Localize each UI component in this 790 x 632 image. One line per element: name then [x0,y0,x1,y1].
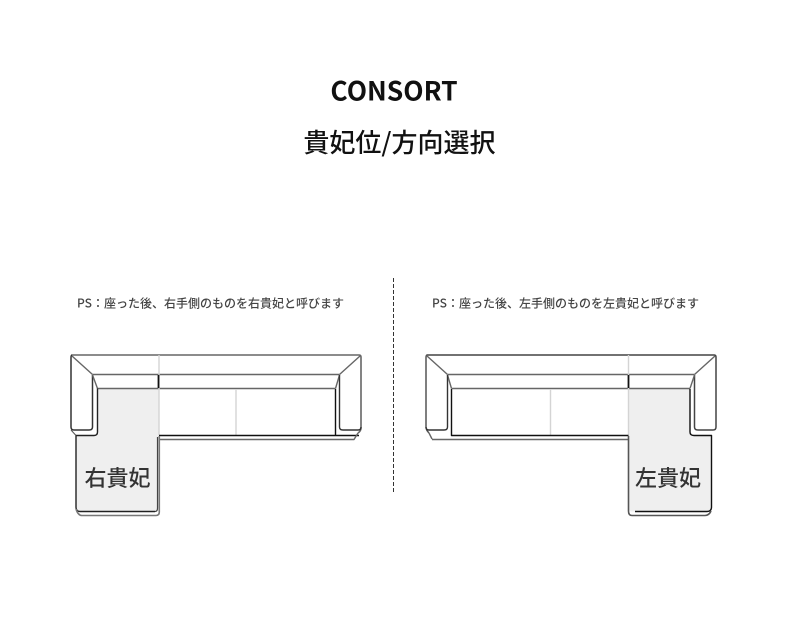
outer back [427,355,716,430]
gray seams [159,355,236,435]
subtitle: 貴妃位/方向選択 [303,123,496,160]
label: left chaise: 左貴妃 [635,461,701,493]
back seam [158,375,160,388]
sofa diagram: left chaise [426,355,716,516]
chaise highlight [628,388,712,512]
outer back [72,355,361,433]
chaise highlight [76,388,159,512]
note: right: PS：座った後、左手側のものを左貴妃と呼びます [432,294,699,312]
seat front [76,388,155,512]
center divider [392,278,394,492]
back cushion lines [427,356,715,388]
label: right chaise: 右貴妃 [84,461,151,493]
title: CONSORT [330,70,458,108]
back seam [628,375,630,388]
right arm [340,375,361,430]
seat front [452,389,712,512]
left arm [426,375,448,430]
chaise edge [76,436,159,516]
chaise edge [628,436,711,516]
sofa diagram: right chaise [71,355,361,516]
gray seams [550,355,628,435]
note: left: PS：座った後、右手側のものを右貴妃と呼びます [77,294,344,312]
back cushion lines [72,356,360,388]
